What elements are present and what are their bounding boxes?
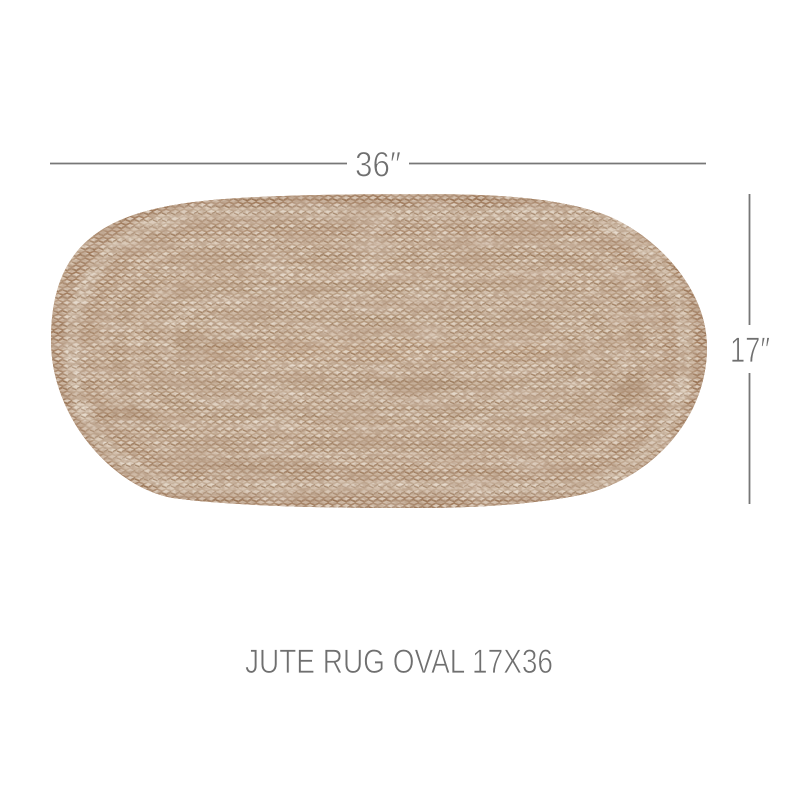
concentric braid bands — [57, 200, 702, 502]
dimension: height 17 inches: 17″ — [730, 331, 770, 370]
darker worn patches — [95, 337, 652, 472]
pale fibre highlights — [40, 185, 720, 520]
dimension: width 36 inches: 36″ — [355, 146, 401, 184]
product title: JUTE RUG OVAL 17X36 — [245, 643, 553, 681]
streaky colour mottling — [40, 185, 720, 520]
braid stitch pattern — [40, 185, 720, 520]
jute fibre mottling — [40, 185, 720, 520]
braided jute rug — [40, 185, 720, 520]
infographic: rug with dimensions — [50, 152, 769, 673]
rug base colour — [40, 185, 720, 520]
